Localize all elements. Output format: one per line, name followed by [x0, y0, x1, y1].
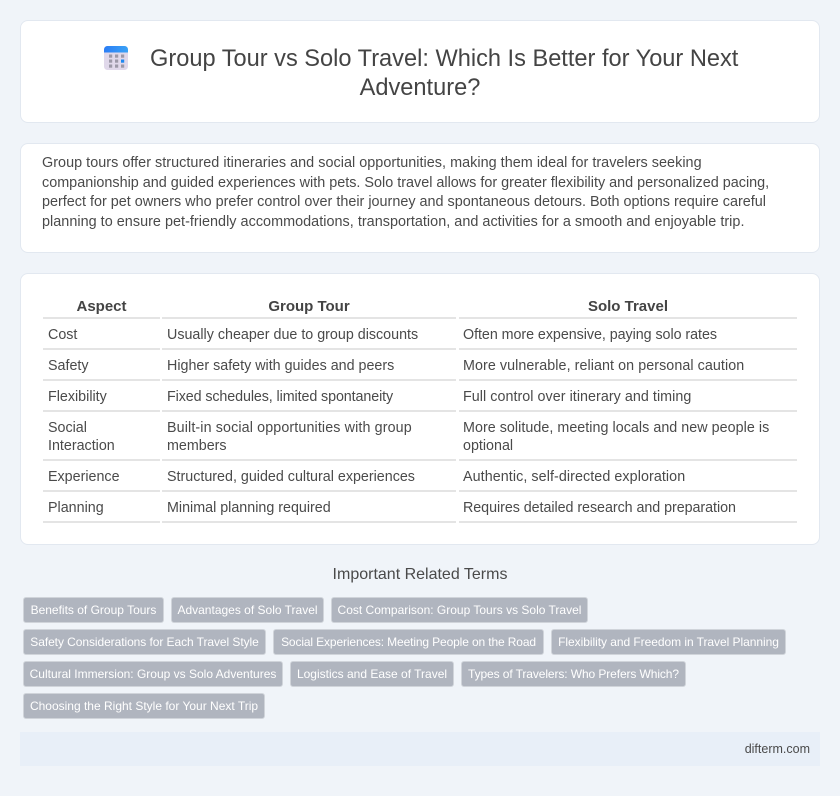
related term tags: Social Experiences: Meeting People on the Road — [281, 635, 536, 649]
row: experience: Experience — [48, 469, 120, 485]
related term tags: Flexibility and Freedom in Travel Planning — [558, 635, 779, 649]
row: safety: More vulnerable, reliant on personal caution — [463, 358, 744, 374]
row: social interaction: More solitude, meeting locals and new people is — [463, 420, 769, 436]
table header: Aspect — [76, 298, 127, 314]
table header: Solo Travel — [588, 298, 668, 314]
related term tags: Choosing the Right Style for Your Next Trip — [30, 699, 258, 713]
row: flexibility: Full control over itinerary and timing — [463, 389, 691, 405]
related term tags: Safety Considerations for Each Travel Style — [30, 635, 259, 649]
row: social interaction: Interaction — [48, 438, 115, 454]
intro text: Group tours offer structured itineraries and social opportunities, making them ideal for travelers seeking — [42, 155, 702, 171]
row: social interaction: Social — [48, 420, 87, 436]
table header — [43, 298, 797, 319]
title — [150, 46, 738, 100]
related term tags: Cost Comparison: Group Tours vs Solo Travel — [338, 603, 581, 617]
row: planning: Minimal planning required — [167, 500, 331, 516]
panel: comparison table — [20, 273, 820, 545]
icon: calendar — [104, 46, 128, 70]
row: social interaction: members — [167, 438, 227, 454]
intro text: perfect for pet owners who prefer control over their journey and spontaneous detours. Both options require careful — [42, 194, 766, 210]
related term tags: Types of Travelers: Who Prefers Which? — [468, 667, 679, 681]
row: safety: Higher safety with guides and peers — [167, 358, 394, 374]
heading: related terms: Important Related Terms — [333, 566, 507, 583]
title: Adventure? — [360, 74, 480, 100]
related term tags: Benefits of Group Tours — [31, 603, 156, 617]
row: social interaction: optional — [463, 438, 513, 454]
intro text: planning to ensure pet-friendly accommodations, transportation, and activities for a smooth and enjoyable trip. — [42, 214, 744, 230]
row: planning: Planning — [48, 500, 104, 516]
row: safety — [43, 358, 797, 381]
title: Group Tour vs Solo Travel: Which Is Better for Your Next — [150, 46, 738, 72]
row: flexibility — [43, 389, 797, 412]
intro text — [42, 155, 769, 230]
row: cost: Often more expensive, paying solo rates — [463, 327, 717, 343]
row: flexibility: Flexibility — [48, 389, 107, 405]
row: experience: Structured, guided cultural experiences — [167, 469, 415, 485]
row: cost: Usually cheaper due to group discounts — [167, 327, 418, 343]
row: experience: Authentic, self-directed exploration — [463, 469, 685, 485]
footer — [20, 732, 820, 766]
row: social interaction: Built-in social opportunities with group — [167, 420, 412, 436]
row: social interaction — [43, 420, 797, 461]
row: experience — [43, 469, 797, 492]
panel: introduction — [20, 143, 820, 253]
row: cost — [43, 327, 797, 350]
panel: title header — [20, 20, 820, 123]
table header: Group Tour — [268, 298, 350, 314]
related term tags: Logistics and Ease of Travel — [297, 667, 447, 681]
intro text: companionship and guided experiences with pets. Solo travel allows for greater flexibility and personalized pacing, — [42, 175, 769, 191]
related term tags: Cultural Immersion: Group vs Solo Adventures — [30, 667, 276, 681]
row: safety: Safety — [48, 358, 89, 374]
related term tags — [23, 597, 786, 719]
row: planning — [43, 500, 797, 523]
row: cost: Cost — [48, 327, 77, 343]
related term tags: Advantages of Solo Travel — [177, 603, 318, 617]
footer: difterm.com — [745, 742, 810, 756]
row: flexibility: Fixed schedules, limited spontaneity — [167, 389, 393, 405]
row: planning: Requires detailed research and preparation — [463, 500, 736, 516]
